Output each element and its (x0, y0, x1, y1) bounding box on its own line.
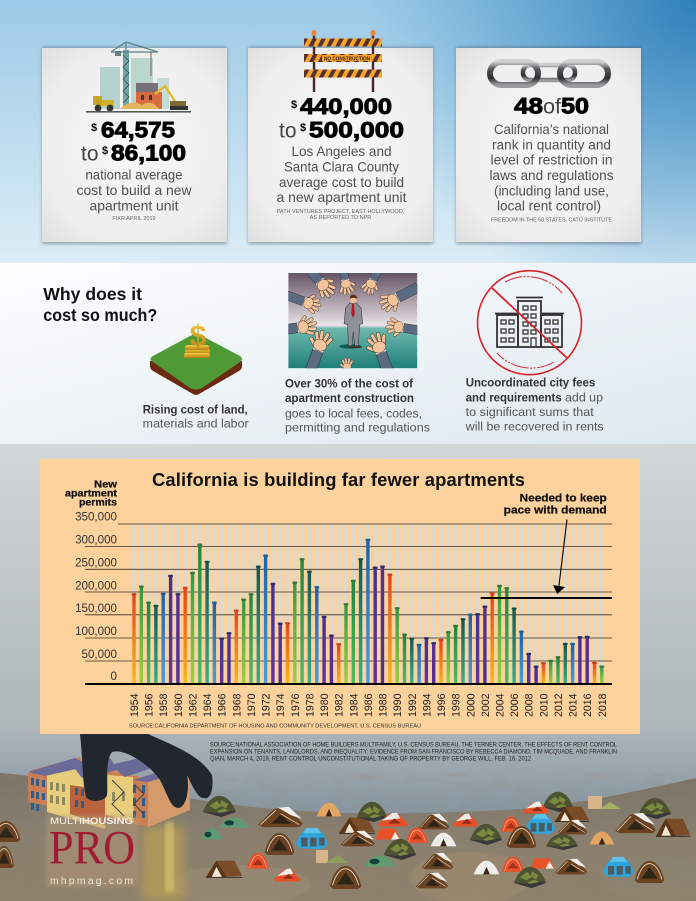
text block: over 30 percent: permitting and regulations (285, 421, 430, 435)
x axis year labels: 1962 (188, 693, 200, 717)
background: sky band (0, 0, 696, 263)
panel: national average cost (42, 42, 227, 244)
demand label (504, 493, 607, 516)
text block: description: level of restriction in (490, 152, 612, 168)
x axis year labels: 1990 (392, 693, 404, 717)
text block: description: apartment unit (90, 197, 179, 213)
logo URL: mhpmag.com (50, 876, 133, 887)
x axis year labels (129, 693, 609, 717)
big number: to $86,100: 86,100 (111, 141, 186, 166)
big number: to $500,000 (279, 117, 404, 142)
source note: FIXR APRIL 2019 (112, 216, 156, 222)
background: pale middle band (0, 263, 696, 444)
x axis year labels: 2014 (568, 693, 580, 717)
chart source: SOURCE:CALIFORNIA DEPARTMENT OF HOUSING AND COMMUNITY DEVELOPMENT, U.S. CENSUS BUREAU (129, 724, 421, 730)
x axis year labels: 2008 (524, 693, 536, 717)
axis title: apartment (65, 489, 118, 500)
text block: sources: QIAN, MARCH 4, 2019, RENT CONTROL UNCONSTITUTIONAL TAKING OF PROPERTY BY GEORGE WILL, FEB. 16, 2012 (210, 757, 532, 763)
icon: coins on plot of land: $ (190, 320, 207, 353)
x axis year labels: 1992 (407, 693, 419, 717)
chart title: California is building far fewer apartments (152, 469, 525, 490)
axis title: permits (79, 498, 117, 509)
text block: over 30 percent: Over 30% of the cost of (285, 377, 414, 391)
x axis year labels: 2012 (553, 693, 565, 717)
grid lines (85, 524, 612, 661)
source note: PATH VENTURES PROJECT, EAST HOLLYWOOD, (277, 209, 405, 215)
axis title (65, 480, 118, 509)
big number: 48 of 50: of (543, 95, 561, 118)
big number: to $500,000: $ (300, 122, 306, 134)
y axis labels (75, 511, 117, 683)
x axis year labels: 1958 (158, 693, 170, 717)
big number: $440,000: $ (291, 99, 297, 111)
x axis year labels: 1954 (129, 693, 141, 717)
icon: road barricade: NO CONSTRUCTION (324, 56, 370, 62)
y axis labels: 200,000 (75, 580, 117, 592)
text block: uncoordinated city fees: to significant sums that (466, 405, 594, 419)
demand threshold line (481, 597, 612, 599)
panel: California's national rank (456, 47, 641, 244)
big number: to $86,100: to (81, 143, 99, 166)
x axis year labels: 2010 (538, 693, 550, 717)
text block: uncoordinated city fees: will be recovered in rents (465, 420, 604, 434)
text block: description: (including land use, (494, 182, 609, 198)
axis title: New (94, 480, 117, 491)
big number: to $86,100: $ (102, 145, 108, 157)
text block: rising cost of land: materials and labor (143, 417, 249, 431)
heading: Why does it cost so much?: Why does it (43, 284, 142, 304)
heading: Why does it cost so much?: cost so much? (43, 305, 157, 325)
text block: description: California’s national (494, 121, 609, 137)
x axis year labels: 2004 (494, 693, 506, 717)
icon: coins on plot of land (150, 320, 242, 395)
arrow to demand line (553, 520, 567, 594)
x axis baseline (85, 683, 612, 685)
text block: sources: EXPANSION ON TENANTS, LANDLORDS, AND INEQUALITY: EVIDENCE FROM SAN FRANCISCO BY REBECCA DIAMOND, TIM MCQUADE, AND FRANKLIN (210, 750, 617, 756)
x axis year labels: 1984 (348, 693, 360, 717)
x axis year labels: 1956 (144, 693, 156, 717)
demand label: pace with demand (504, 504, 607, 516)
panel: Los Angeles and Santa Clara cost (248, 30, 433, 244)
big number: 48 of 50: 50 (561, 93, 589, 118)
y axis labels: 250,000 (75, 556, 117, 570)
y axis labels: 0 (111, 670, 117, 683)
y axis labels: 300,000 (75, 534, 117, 547)
icon: prohibited apartment building (478, 271, 582, 375)
big number: 48 of 50: 48 (514, 93, 543, 118)
big number: to $500,000: to (279, 119, 297, 142)
text block: description: rank in quantity and (492, 136, 611, 152)
icon: road barricade (304, 30, 382, 92)
text block: description (490, 121, 614, 214)
icon: construction site (86, 42, 191, 113)
text block: uncoordinated city fees (465, 376, 604, 434)
logo PRO: PRO (49, 821, 135, 874)
text block: rising cost of land (143, 402, 249, 431)
y axis labels: 100,000 (75, 625, 117, 638)
text block: over 30 percent: apartment construction (285, 391, 414, 405)
x axis year labels: 1980 (319, 693, 331, 717)
big number: $64,575: $ (91, 122, 97, 134)
y axis labels: 50,000 (82, 648, 117, 661)
y axis labels: 350,000 (75, 511, 117, 524)
x axis year labels: 2000 (465, 693, 477, 717)
text block: rising cost of land: Rising cost of land, (143, 402, 248, 416)
x axis year labels: 2016 (582, 693, 594, 717)
illustration: hands around a man with empty pockets (288, 273, 418, 368)
text block: description: cost to build a new (76, 182, 192, 198)
gold dust falling from building (142, 822, 184, 901)
big number: 48 of 50 (514, 93, 589, 118)
x axis year labels: 1978 (304, 693, 316, 717)
source note: FREEDOM IN THE 50 STATES, CATO INSTITUTE (491, 218, 612, 224)
background: lower grey sky (0, 444, 696, 819)
text block: description: Santa Clara County (284, 158, 399, 174)
text block: description: average cost to build (279, 174, 404, 190)
vertical stripes (132, 524, 604, 684)
x axis year labels: 2018 (597, 693, 609, 717)
panel: bar chart (40, 459, 640, 734)
text block: uncoordinated city fees: Uncoordinated city fees (466, 376, 595, 390)
text block: uncoordinated city fees: add up (565, 390, 603, 404)
icon: chain links (490, 62, 608, 85)
x axis year labels: 1988 (378, 693, 390, 717)
text block: description: Los Angeles and (292, 143, 392, 159)
heading: Why does it cost so much? (43, 284, 157, 325)
icon: businessman (339, 295, 363, 349)
demand label: Needed to keep (520, 493, 607, 505)
source note: AS REPORTED TO NPR (310, 215, 371, 221)
x axis year labels: 1998 (451, 693, 463, 717)
text block: description (276, 143, 407, 205)
background: ground (0, 773, 696, 901)
big number: to $86,100 (81, 141, 186, 166)
x axis year labels: 2002 (480, 693, 492, 717)
x axis year labels: 1968 (231, 693, 243, 717)
text block: over 30 percent: goes to local fees, codes, (285, 406, 422, 420)
text block: over 30 percent (285, 377, 430, 435)
x axis year labels: 1964 (202, 693, 214, 717)
x axis year labels: 1960 (173, 693, 185, 717)
x axis year labels: 1972 (261, 693, 273, 717)
x axis year labels: 1966 (217, 693, 229, 717)
illustration: apartment building (28, 752, 190, 829)
y axis labels: 150,000 (75, 602, 117, 615)
source note (277, 209, 405, 221)
x axis year labels: 1974 (275, 693, 287, 717)
logo wordmark: MULTI HOUSING (50, 816, 133, 826)
text block: uncoordinated city fees: and requirements (466, 390, 562, 404)
tents on the ground (0, 792, 690, 889)
x axis year labels: 1970 (246, 693, 258, 717)
text block: description (76, 167, 192, 213)
big number: to $500,000: 500,000 (309, 117, 404, 142)
big number: $440,000: 440,000 (300, 94, 392, 119)
x axis year labels: 1994 (421, 693, 433, 717)
x axis year labels: 1976 (290, 693, 302, 717)
illustration: grabbing hand (80, 734, 213, 808)
text block: sources: SOURCE:NATIONAL ASSOCIATION OF HOME BUILDERS MULTIFAMILY, U.S. CENSUS BUREAU, THE TERNER CENTER, THE EFFECTS OF RENT CONTROL (210, 743, 618, 749)
bars (132, 540, 604, 684)
logo: Multi-Housing Pro (46, 815, 138, 887)
text block: description: local rent control) (497, 198, 601, 214)
x axis year labels: 2006 (509, 693, 521, 717)
text block: description: a new apartment unit (276, 189, 407, 205)
text block: sources (210, 743, 618, 763)
text block: description: laws and regulations (490, 167, 614, 183)
x axis year labels: 1982 (334, 693, 346, 717)
text block: description: national average (86, 167, 183, 183)
big number: $64,575: 64,575 (101, 117, 175, 142)
x axis year labels: 1986 (363, 693, 375, 717)
x axis year labels: 1996 (436, 693, 448, 717)
